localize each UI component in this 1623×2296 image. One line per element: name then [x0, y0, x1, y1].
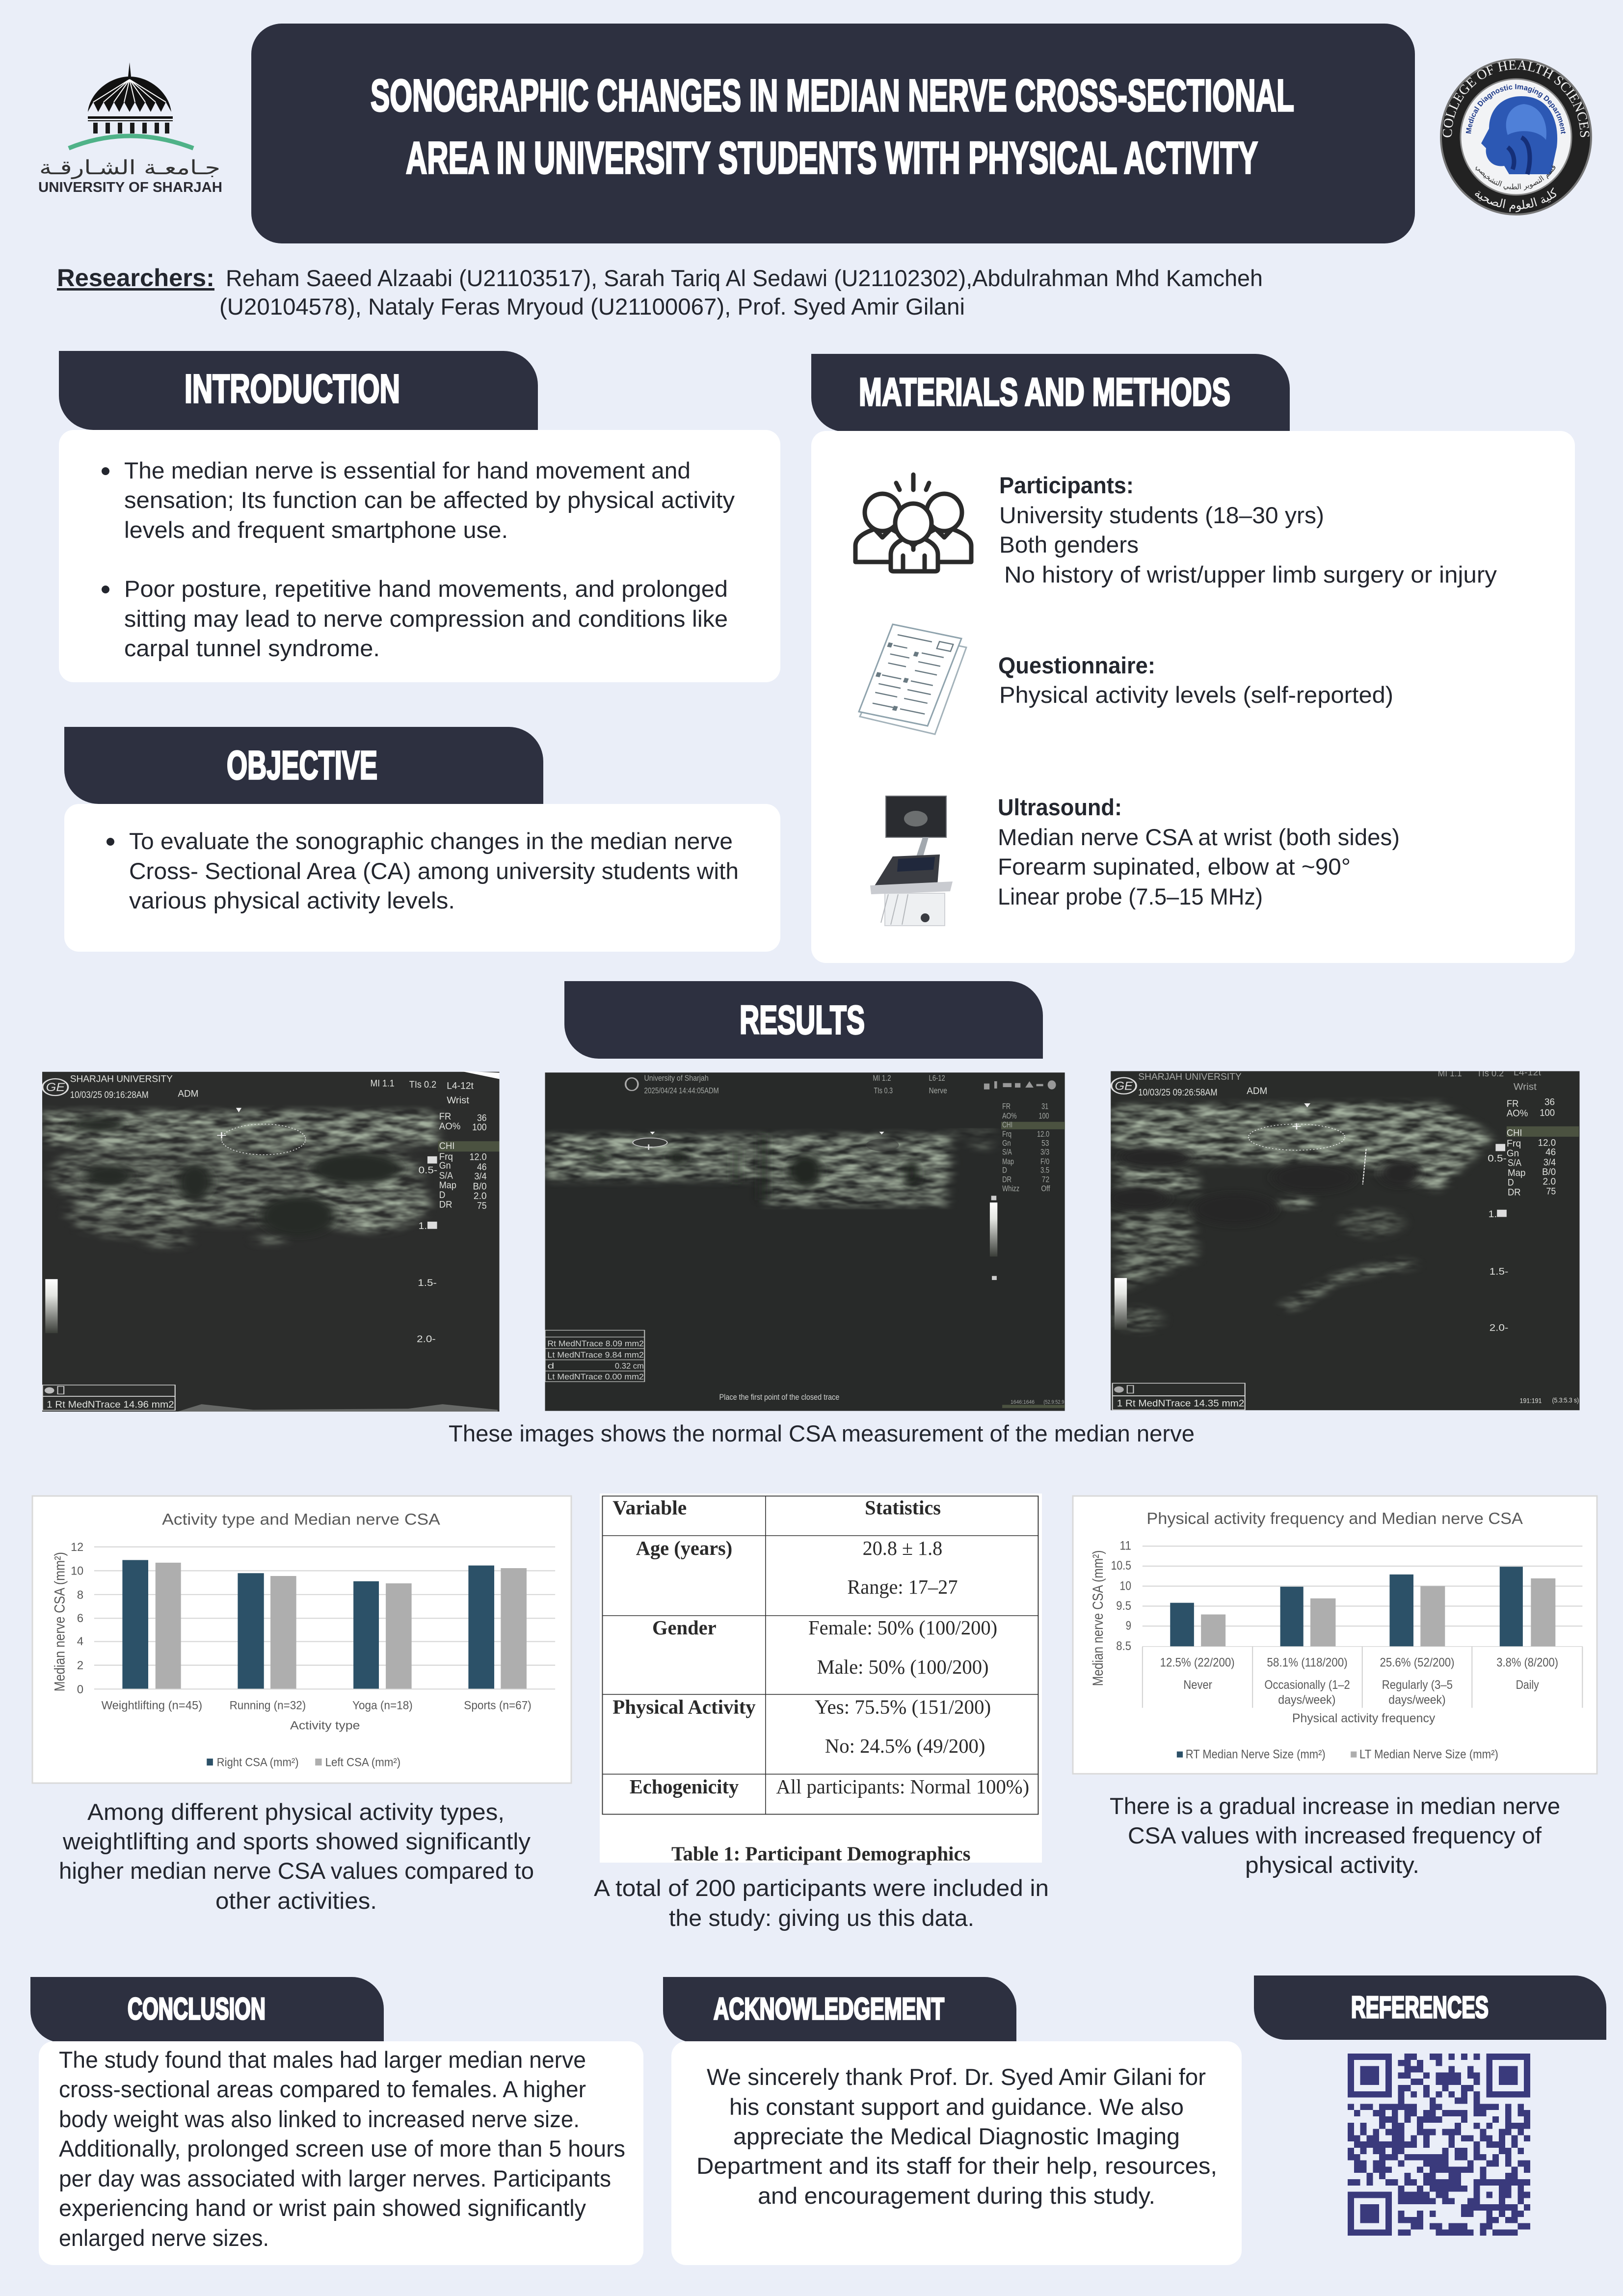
- table: participant demographics: Variable: [612, 1497, 687, 1519]
- ultrasound image 2: 1646:1646: [1011, 1399, 1035, 1405]
- ultrasound image 1: D: [439, 1190, 445, 1201]
- ultrasound image 1: ADM: [178, 1088, 198, 1099]
- icon: QR code: [1348, 2054, 1530, 2236]
- panel: conclusion: CONCLUSION: [128, 1992, 266, 2026]
- panel: conclusion: body weight was also linked to increased nerve size.: [59, 2106, 580, 2132]
- ultrasound image 3: ADM: [1247, 1086, 1267, 1096]
- x axis labels: [1160, 1656, 1558, 1725]
- x axis labels: Activity type: [290, 1719, 360, 1732]
- ultrasound image 3: FR: [1507, 1098, 1518, 1109]
- ultrasound image 3: 1.: [1489, 1209, 1497, 1220]
- ultrasound image 2: d: [547, 1362, 554, 1370]
- y axis numbers: 10: [71, 1565, 83, 1577]
- ultrasound image 1: Wrist: [447, 1095, 469, 1106]
- text: questionnaire: [998, 652, 1393, 708]
- panel: introduction: sensation; Its function can be affected by physical activity: [124, 487, 735, 513]
- ultrasound image 3: SHARJAH UNIVERSITY: [1138, 1071, 1242, 1082]
- ultrasound image 3: 2.0-: [1490, 1323, 1508, 1333]
- heading: results: [564, 981, 1043, 1059]
- panel: acknowledgement: [663, 1977, 1242, 2265]
- panel: objective: OBJECTIVE: [227, 743, 377, 788]
- panel: conclusion: enlarged nerve sizes.: [59, 2225, 269, 2251]
- panel: acknowledgement: and encouragement during this study.: [758, 2183, 1155, 2209]
- ultrasound image 3: (5.3:5.3 s): [1552, 1396, 1579, 1404]
- ultrasound image 3: B/0: [1542, 1167, 1556, 1177]
- table: participant demographics: 20.8 ± 1.8: [863, 1537, 942, 1560]
- ultrasound image 2: D: [1002, 1166, 1007, 1175]
- panel: acknowledgement: ACKNOWLEDGEMENT: [714, 1992, 944, 2026]
- researchers: (U20104578), Nataly Feras Mryoud (U21100067), Prof. Syed Amir Gilani: [219, 294, 965, 320]
- x axis labels: Occasionally (1–2: [1264, 1678, 1350, 1692]
- ultrasound image 3: D: [1508, 1177, 1514, 1188]
- table: participant demographics: [600, 1494, 1042, 1865]
- ultrasound image 2: Lt MedNTrace 9.84 mm2: [547, 1350, 644, 1360]
- ultrasound image 2: DR: [1002, 1175, 1011, 1184]
- caption: table: the study: giving us this data.: [669, 1905, 974, 1931]
- ultrasound image 2: Frq: [1002, 1129, 1011, 1139]
- ultrasound image 2: [545, 1072, 1065, 1411]
- panel: objective: [64, 727, 780, 952]
- ultrasound image 1: DR: [439, 1200, 452, 1210]
- ultrasound image 3: 12.0: [1538, 1137, 1556, 1148]
- ultrasound image 1: Gn: [439, 1160, 451, 1171]
- ultrasound image 3: [1107, 1067, 1580, 1410]
- ultrasound image 3: Frq: [1507, 1138, 1521, 1149]
- ultrasound image 3: S/A: [1508, 1158, 1521, 1168]
- x axis labels: 12.5% (22/200): [1160, 1656, 1235, 1669]
- panel: conclusion: cross-sectional areas compared to females. A higher: [59, 2076, 586, 2102]
- ultrasound image 2: MI 1.2: [873, 1073, 891, 1083]
- x axis labels: Never: [1183, 1678, 1212, 1692]
- x axis labels: Yoga (n=18): [352, 1699, 413, 1712]
- table: participant demographics: Statistics: [865, 1497, 941, 1519]
- ultrasound image 1: SHARJAH UNIVERSITY: [70, 1073, 173, 1084]
- y axis title: Median nerve CSA (mm²): [53, 1552, 68, 1691]
- ultrasound image 1: FR: [439, 1111, 451, 1122]
- bars: left CSA: [156, 1563, 527, 1689]
- ultrasound image 3: CHI: [1507, 1128, 1522, 1138]
- ultrasound image 2: 12.0: [1037, 1129, 1049, 1139]
- ultrasound image 3: TIs 0.2: [1477, 1068, 1504, 1079]
- chart: physical activity frequency and median nerve CSA: 3.8% (8/200): [1496, 1656, 1558, 1669]
- text: ultrasound: Forearm supinated, elbow at ~90°: [998, 854, 1351, 880]
- panel: materials and methods: MATERIALS AND METHODS: [859, 370, 1230, 414]
- table: participant demographics: Echogenicity: [630, 1776, 739, 1798]
- ultrasound image 2: 53: [1041, 1139, 1049, 1148]
- ultrasound image 2: FR: [1002, 1102, 1011, 1111]
- panel: introduction: The median nerve is essential for hand movement and: [124, 457, 691, 483]
- ultrasound image 2: S/A: [1002, 1148, 1012, 1157]
- icon: ultrasound machine: [870, 796, 953, 926]
- x axis labels: Regularly (3–5: [1382, 1678, 1453, 1692]
- ultrasound image 1: 3/4: [474, 1171, 487, 1182]
- ultrasound image 1: 1.: [419, 1221, 427, 1231]
- legend: RT Median Nerve Size (mm²): [1186, 1747, 1326, 1761]
- ultrasound image 2: F/0: [1040, 1157, 1049, 1166]
- ultrasound image 1: 2.0-: [417, 1334, 436, 1344]
- panel: introduction: INTRODUCTION: [185, 367, 400, 411]
- ultrasound image 3: 100: [1540, 1107, 1555, 1118]
- x axis labels: Physical activity frequency: [1292, 1711, 1435, 1725]
- panel: introduction: sitting may lead to nerve compression and conditions like: [124, 606, 728, 632]
- ultrasound image 3: 10/03/25 09:26:58AM: [1138, 1087, 1218, 1098]
- panel: conclusion: per day was associated with larger nerves. Participants: [59, 2165, 611, 2191]
- caption: ultrasound images: These images shows the normal CSA measurement of the median nerve: [449, 1420, 1195, 1446]
- table: participant demographics: No: 24.5% (49/200): [825, 1735, 985, 1758]
- y axis numbers: 12: [71, 1541, 83, 1554]
- ultrasound image 2: 2025/04/24 14:44:05ADM: [644, 1086, 719, 1095]
- x axis labels: Running (n=32): [230, 1699, 306, 1712]
- ultrasound image 3: AO%: [1507, 1108, 1528, 1119]
- logo: College of Health Sciences: [1440, 58, 1592, 215]
- ultrasound image 3: 0.5-: [1488, 1153, 1507, 1164]
- ultrasound image 1: Map: [439, 1180, 456, 1191]
- ultrasound image 3: Map: [1508, 1168, 1525, 1178]
- ultrasound image 3: MI 1.1: [1438, 1068, 1462, 1079]
- text: participants: Participants:: [999, 472, 1134, 498]
- icon: participants group: [855, 475, 971, 571]
- text: questionnaire: Questionnaire:: [998, 652, 1155, 678]
- y axis numbers: 0: [77, 1683, 83, 1696]
- ultrasound image 1: MI 1.1: [370, 1078, 395, 1089]
- ultrasound image 2: 72: [1042, 1175, 1049, 1184]
- ultrasound image 1: CHI: [439, 1141, 454, 1151]
- panel: introduction: [59, 351, 780, 682]
- ultrasound image 3: Gn: [1507, 1148, 1519, 1159]
- ultrasound image 1: 1.5-: [418, 1278, 437, 1288]
- ultrasound image 1: 0.5-: [419, 1165, 437, 1175]
- table: participant demographics: Age (years): [636, 1537, 732, 1560]
- legend: Left CSA (mm²): [325, 1756, 400, 1769]
- text: ultrasound: Linear probe (7.5–15 MHz): [998, 883, 1263, 909]
- ultrasound image 3: 1.5-: [1490, 1266, 1508, 1277]
- ultrasound image 1: Frq: [439, 1151, 453, 1162]
- researchers: Researchers:: [57, 264, 214, 292]
- ultrasound image 2: L6-12: [929, 1073, 945, 1083]
- caption: activity type chart: [59, 1799, 534, 1914]
- ultrasound image 1: GE: [46, 1080, 65, 1094]
- y axis numbers: 8: [77, 1588, 83, 1602]
- panel: references: REFERENCES: [1351, 1991, 1489, 2025]
- panel: materials and methods: [811, 354, 1575, 963]
- table: participant demographics: Table 1: Participant Demographics: [671, 1843, 971, 1865]
- researchers: Reham Saeed Alzaabi (U21103517), Sarah Tariq Al Sedawi (U21102302),Abdulrahman Mhd Kamcheh: [226, 265, 1263, 291]
- ultrasound image 1: 12.0: [470, 1152, 487, 1162]
- panel: conclusion: Additionally, prolonged screen use of more than 5 hours: [59, 2136, 625, 2162]
- caption: activity type chart: other activities.: [215, 1888, 377, 1914]
- caption: frequency chart: There is a gradual increase in median nerve: [1110, 1793, 1560, 1819]
- caption: frequency chart: physical activity.: [1245, 1852, 1419, 1878]
- panel: references: [1254, 1976, 1606, 2236]
- ultrasound image 2: 0.32 cm: [615, 1362, 644, 1370]
- ultrasound image 2: Place the first point of the closed trace: [719, 1392, 839, 1402]
- x axis labels: Sports (n=67): [464, 1699, 532, 1712]
- logo: University of Sharjah: جـامعـة الشـارقـة: [39, 157, 220, 179]
- legend: Right CSA (mm²): [217, 1756, 299, 1769]
- y axis numbers: [71, 1541, 83, 1696]
- chart: physical activity frequency and median nerve CSA: 9.5: [1116, 1599, 1131, 1612]
- x axis labels: Weightlifting (n=45): [102, 1699, 202, 1712]
- caption: table: [594, 1875, 1049, 1931]
- chart: physical activity frequency and median nerve CSA: 9: [1126, 1619, 1131, 1632]
- table: participant demographics: Range: 17–27: [847, 1576, 958, 1599]
- caption: table: A total of 200 participants were included in: [594, 1875, 1049, 1901]
- ultrasound image 2: 31: [1041, 1102, 1048, 1111]
- panel: objective: Cross- Sectional Area (CA) among university students with: [129, 858, 739, 884]
- panel: objective: To evaluate the sonographic changes in the median nerve: [129, 828, 733, 854]
- panel: introduction: carpal tunnel syndrome.: [124, 635, 380, 661]
- panel: introduction: Poor posture, repetitive hand movements, and prolonged: [124, 576, 728, 602]
- ultrasound image 1: 46: [477, 1162, 487, 1173]
- ultrasound image 3: L4-12t: [1514, 1067, 1541, 1078]
- text: ultrasound: Ultrasound:: [998, 794, 1122, 820]
- ultrasound image 3: 1 Rt MedNTrace 14.35 mm2: [1117, 1398, 1244, 1409]
- ultrasound image 3: 75: [1546, 1186, 1556, 1197]
- table: participant demographics: All participants: Normal 100%): [776, 1776, 1029, 1798]
- caption: activity type chart: higher median nerve CSA values compared to: [59, 1858, 534, 1884]
- ultrasound image 1: 36: [477, 1113, 487, 1123]
- ultrasound image 2: AO%: [1002, 1111, 1017, 1121]
- ultrasound image 2: 3.5: [1040, 1166, 1049, 1175]
- panel: acknowledgement: his constant support and guidance. We also: [729, 2094, 1184, 2120]
- text: ultrasound: Median nerve CSA at wrist (both sides): [998, 824, 1400, 850]
- researchers: [57, 264, 1263, 320]
- ultrasound image 3: Wrist: [1514, 1081, 1537, 1092]
- ultrasound image 2: Map: [1002, 1157, 1014, 1166]
- caption: frequency chart: [1110, 1793, 1560, 1878]
- panel: conclusion: experiencing hand or wrist pain showed significantly: [59, 2195, 586, 2221]
- caption: frequency chart: CSA values with increased frequency of: [1128, 1822, 1542, 1848]
- x axis labels: days/week): [1388, 1693, 1446, 1707]
- panel: introduction: levels and frequent smartphone use.: [124, 517, 508, 543]
- text: questionnaire: Physical activity levels (self-reported): [999, 682, 1393, 708]
- icon: questionnaire sheets: [859, 624, 966, 734]
- logo: College of Health Sciences: قسم التصوير الطبي التشخيصي: [1475, 165, 1556, 190]
- ultrasound image 2: CHI: [1002, 1120, 1012, 1129]
- ultrasound image 2: TIs 0.3: [874, 1086, 893, 1095]
- y axis numbers: 2: [77, 1659, 83, 1672]
- x axis labels: days/week): [1278, 1693, 1335, 1707]
- logo: College of Health Sciences: COLLEGE OF HEALTH SCIENCES: [1443, 60, 1589, 137]
- ultrasound image 3: 3/4: [1543, 1157, 1556, 1168]
- ultrasound image 2: Whizz: [1002, 1184, 1019, 1193]
- text: ultrasound: [998, 794, 1400, 909]
- logo: College of Health Sciences: كلية العلوم الصحية: [1475, 187, 1556, 212]
- ultrasound image 3: 2.0: [1543, 1176, 1556, 1187]
- x axis labels: 25.6% (52/200): [1380, 1656, 1455, 1669]
- ultrasound image 1: 2.0: [474, 1191, 487, 1201]
- ultrasound image 2: 100: [1038, 1111, 1049, 1121]
- panel: acknowledgement: We sincerely thank Prof. Dr. Syed Amir Gilani for: [707, 2064, 1206, 2090]
- x axis labels: Daily: [1516, 1678, 1539, 1692]
- ultrasound image 3: 191:191: [1520, 1397, 1542, 1405]
- logo: University of Sharjah: [38, 62, 222, 195]
- x axis labels: 58.1% (118/200): [1267, 1656, 1348, 1669]
- chart title: Activity type and Median nerve CSA: [162, 1511, 440, 1528]
- logo: College of Health Sciences: Medical Diagnostic Imaging Department: [1465, 84, 1566, 134]
- text: participants: University students (18–30 yrs): [999, 502, 1324, 528]
- chart: activity type and median nerve CSA: [32, 1496, 571, 1783]
- chart: physical activity frequency and median nerve CSA: 10.5: [1111, 1559, 1131, 1573]
- ultrasound image 2: (52.9:52.9: [1043, 1399, 1064, 1405]
- panel: conclusion: The study found that males had larger median nerve: [59, 2047, 586, 2073]
- heading: results: RESULTS: [740, 998, 865, 1042]
- ultrasound image 1: TIs 0.2: [409, 1079, 436, 1090]
- chart: physical activity frequency and median nerve CSA: 10: [1119, 1579, 1131, 1593]
- ultrasound image 2: Gn: [1002, 1139, 1011, 1148]
- caption: activity type chart: weightlifting and sports showed significantly: [62, 1828, 531, 1854]
- ultrasound image 3: 36: [1544, 1097, 1555, 1107]
- ultrasound image 1: 1 Rt MedNTrace 14.96 mm2: [47, 1399, 174, 1410]
- ultrasound image 2: University of Sharjah: [644, 1073, 709, 1083]
- text: participants: Both genders: [999, 532, 1139, 558]
- chart: physical activity frequency and median nerve CSA: [1073, 1496, 1597, 1774]
- ultrasound image 2: 3/3: [1040, 1148, 1049, 1157]
- logo: University of Sharjah: UNIVERSITY OF SHARJAH: [38, 180, 222, 195]
- caption: activity type chart: Among different physical activity types,: [87, 1799, 505, 1825]
- panel: conclusion: [30, 1977, 643, 2265]
- ultrasound image 1: B/0: [473, 1181, 487, 1192]
- panel: objective: various physical activity levels.: [129, 887, 455, 913]
- ultrasound image 2: Nerve: [929, 1086, 947, 1095]
- ultrasound image 1: AO%: [439, 1121, 460, 1131]
- panel: acknowledgement: appreciate the Medical Diagnostic Imaging: [733, 2123, 1180, 2149]
- table: participant demographics: Female: 50% (100/200): [808, 1617, 997, 1639]
- y axis title: Median nerve CSA (mm²): [1090, 1550, 1107, 1686]
- table: participant demographics: Yes: 75.5% (151/200): [815, 1696, 991, 1718]
- x axis labels: [102, 1699, 532, 1732]
- ultrasound image 1: 75: [477, 1201, 487, 1211]
- bars: right CSA: [122, 1560, 494, 1689]
- text: participants: No history of wrist/upper limb surgery or injury: [1004, 561, 1497, 587]
- text: participants: [999, 472, 1497, 587]
- panel: acknowledgement: Department and its staff for their help, resources,: [696, 2153, 1217, 2179]
- y axis numbers: 6: [77, 1612, 83, 1625]
- bars: LT: [1201, 1578, 1555, 1646]
- ultrasound image 1: 100: [472, 1122, 487, 1133]
- y axis numbers: 11: [1119, 1539, 1131, 1552]
- ultrasound image 3: 46: [1545, 1147, 1556, 1157]
- ultrasound image 1: S/A: [439, 1170, 453, 1181]
- y axis numbers: 4: [77, 1635, 83, 1648]
- bars: RT: [1170, 1567, 1523, 1646]
- ultrasound image 3: GE: [1115, 1079, 1133, 1093]
- ultrasound image 1: 10/03/25 09:16:28AM: [70, 1090, 149, 1100]
- ultrasound image 3: DR: [1508, 1187, 1521, 1198]
- ultrasound image 2: Off: [1041, 1184, 1050, 1193]
- ultrasound image 1: [42, 1071, 500, 1412]
- title banner: [251, 24, 1415, 243]
- table: participant demographics: Male: 50% (100/200): [817, 1656, 989, 1679]
- ultrasound image 2: Rt MedNTrace 8.09 mm2: [547, 1339, 644, 1348]
- table: participant demographics: Gender: [652, 1617, 717, 1639]
- ultrasound image 1: L4-12t: [447, 1081, 474, 1091]
- ultrasound image 2: Lt MedNTrace 0.00 mm2: [547, 1372, 644, 1381]
- table: participant demographics: Physical Activity: [612, 1696, 756, 1718]
- y axis numbers: [1111, 1539, 1131, 1653]
- chart: physical activity frequency and median nerve CSA: 8.5: [1116, 1639, 1131, 1653]
